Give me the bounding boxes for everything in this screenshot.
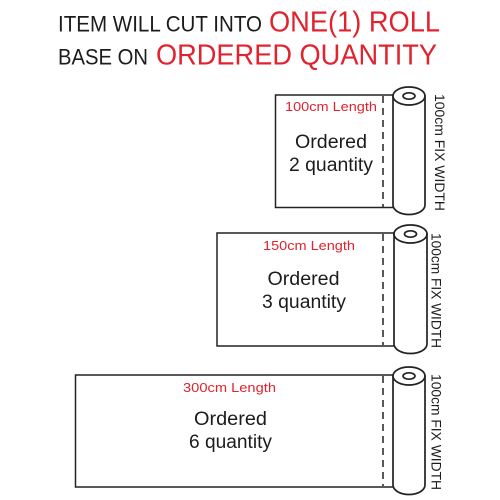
- width label: 100cm FIX WIDTH: [428, 233, 444, 348]
- ordered text: [189, 409, 272, 453]
- ordered text: 6 quantity: [189, 432, 272, 453]
- length label: 300cm Length: [183, 380, 276, 395]
- width label: 100cm FIX WIDTH: [432, 94, 447, 211]
- width label: 100cm FIX WIDTH: [428, 374, 444, 490]
- ordered text: Ordered: [194, 409, 267, 430]
- title line 1: ONE(1) ROLL: [269, 6, 440, 38]
- panel: 6 quantity roll: [76, 367, 444, 494]
- panel: 3 quantity roll: [217, 225, 444, 354]
- title: [58, 6, 440, 72]
- cut line: [382, 96, 384, 207]
- fabric sheet: [76, 375, 395, 487]
- title line 1: [58, 6, 440, 38]
- ordered text: [262, 269, 346, 313]
- fabric sheet: [217, 233, 395, 346]
- ordered text: [289, 132, 373, 176]
- ordered text: 2 quantity: [289, 155, 373, 176]
- ordered text: 3 quantity: [262, 292, 346, 313]
- ordered text: Ordered: [268, 269, 340, 290]
- roll icon: [394, 225, 427, 354]
- fabric sheet: [276, 95, 396, 208]
- ordered text: Ordered: [295, 132, 367, 153]
- roll icon: [393, 87, 425, 214]
- title line 2: ORDERED QUANTITY: [156, 40, 437, 72]
- cut line: [382, 376, 384, 486]
- roll icon: [393, 367, 425, 494]
- title line 2: BASE ON: [58, 44, 148, 70]
- length label: 100cm Length: [285, 99, 377, 114]
- length label: 150cm Length: [263, 238, 355, 253]
- panel: 2 quantity roll: [276, 87, 447, 214]
- title line 1: ITEM WILL CUT INTO: [58, 12, 262, 36]
- cut line: [382, 234, 384, 345]
